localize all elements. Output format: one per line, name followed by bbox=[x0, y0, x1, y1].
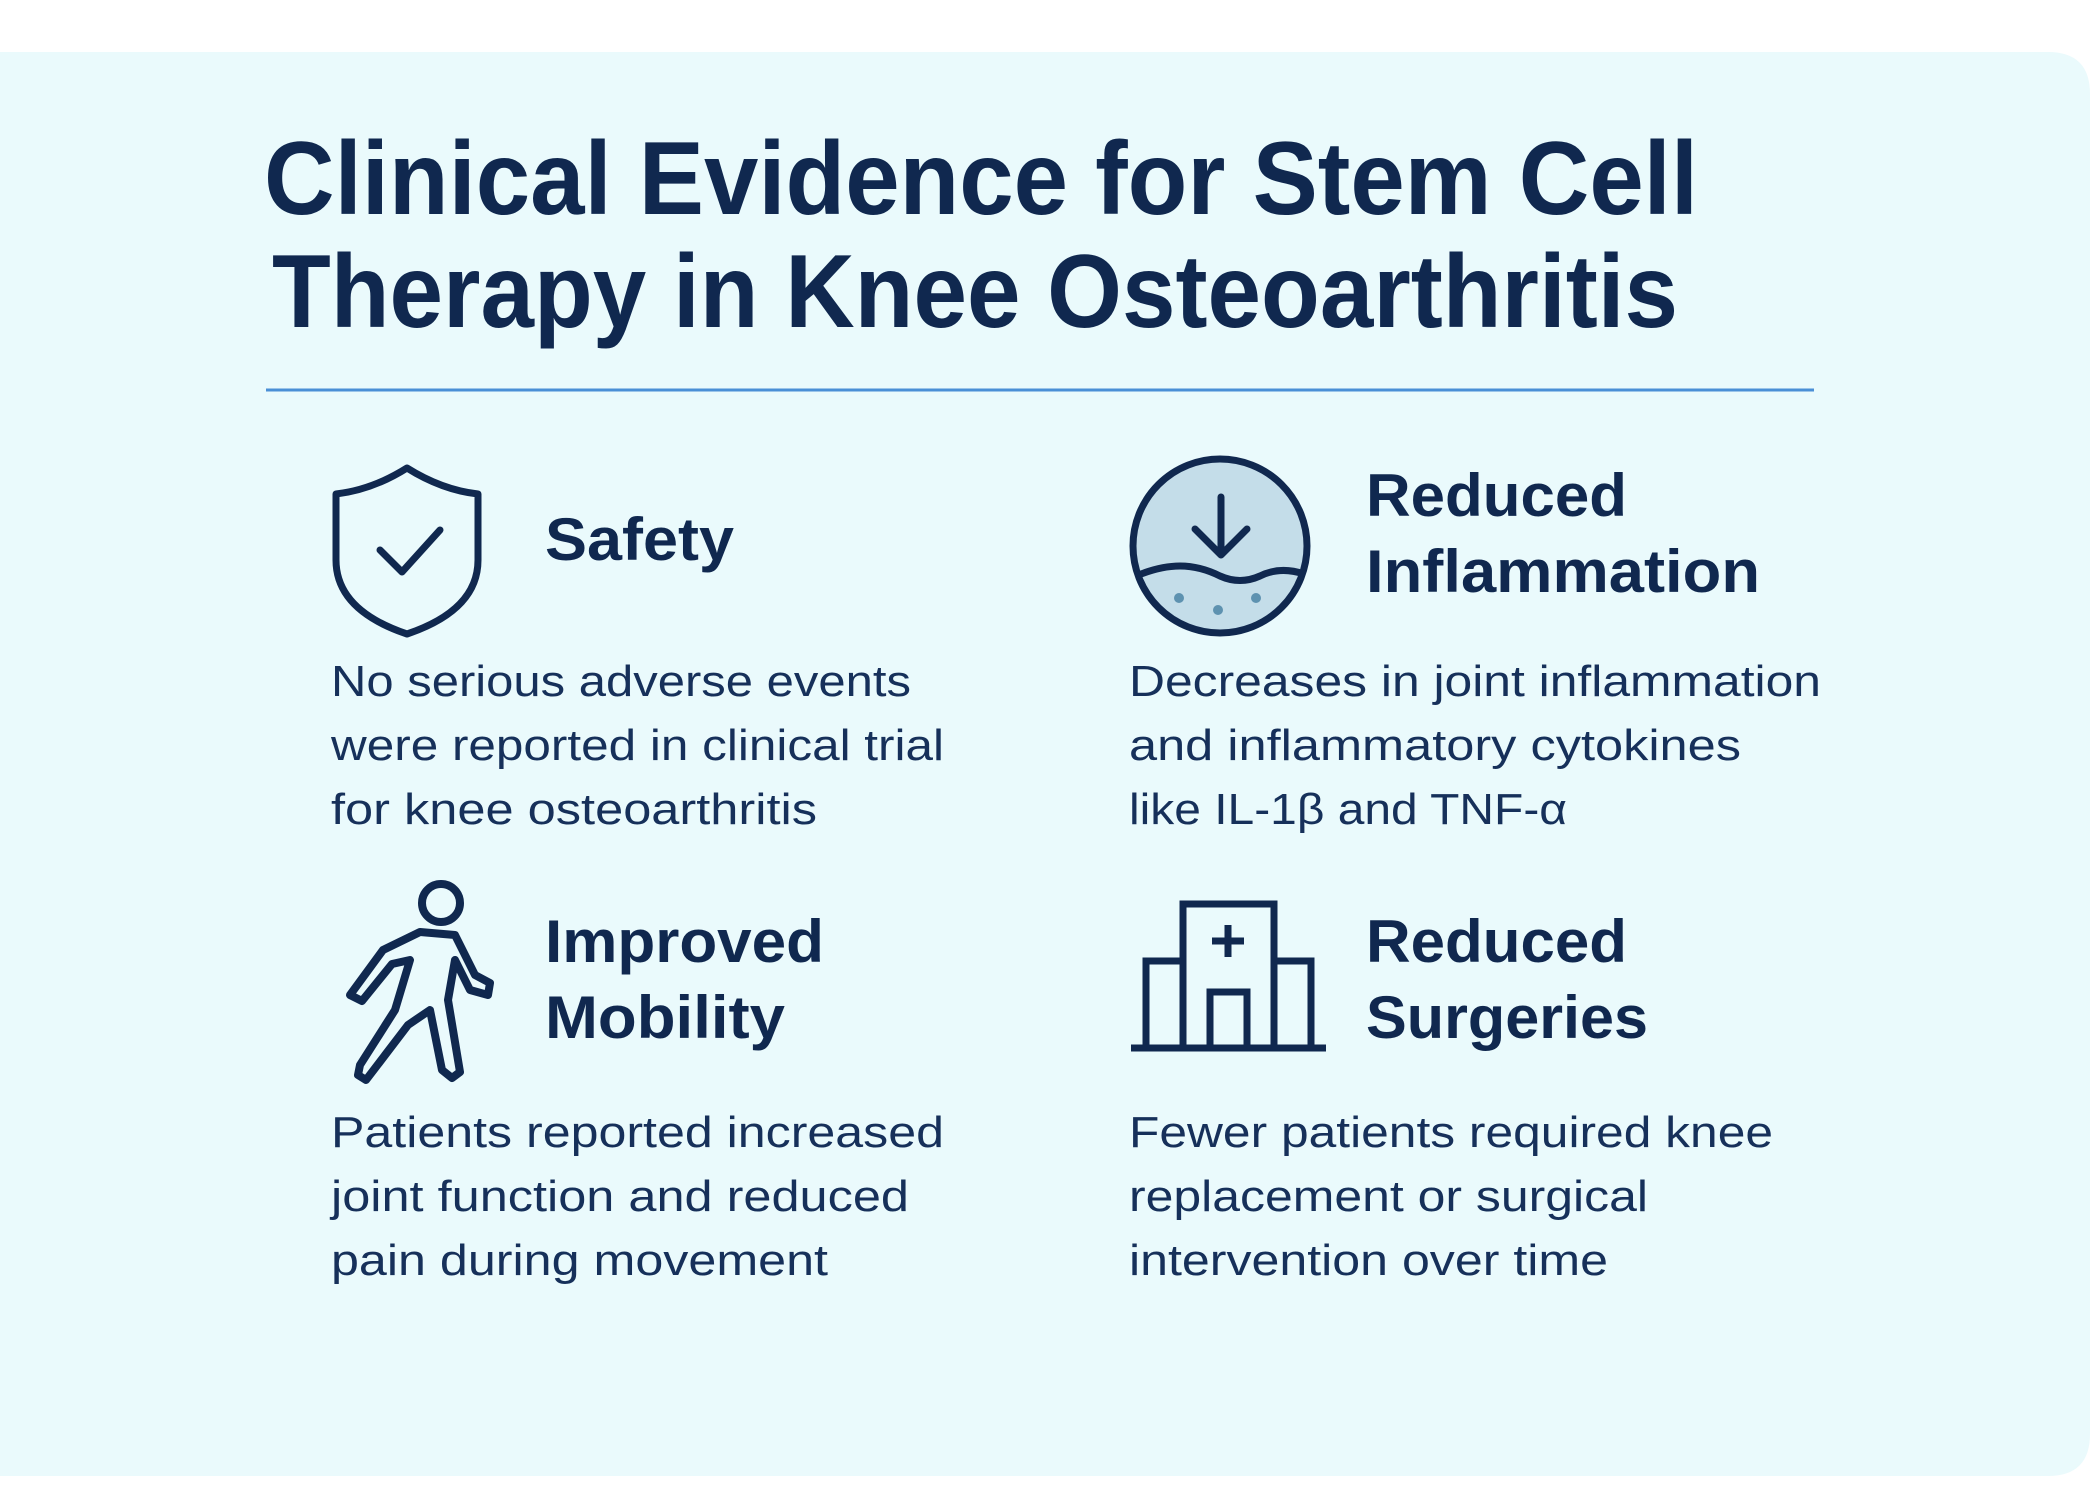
heading: reduced surgeries: Reduced bbox=[1366, 908, 1627, 975]
text: surgeries: Fewer patients required knee bbox=[1129, 1108, 1773, 1157]
title: Clinical Evidence for Stem Cell bbox=[264, 121, 1698, 237]
text: mobility: pain during movement bbox=[331, 1236, 828, 1285]
icon: shield bbox=[336, 468, 478, 634]
heading: improved mobility: Improved bbox=[545, 908, 824, 975]
text: inflammation bbox=[1129, 657, 1821, 834]
panel: reduced inflammation bbox=[1129, 459, 1821, 834]
heading: reduced surgeries: Surgeries bbox=[1366, 984, 1648, 1051]
text: mobility: joint function and reduced bbox=[329, 1172, 909, 1221]
title: Therapy in Knee Osteoarthritis bbox=[272, 234, 1678, 350]
heading: reduced inflammation bbox=[1366, 462, 1760, 605]
icon: inflammation circle bbox=[1133, 459, 1307, 633]
panel: improved mobility bbox=[329, 884, 944, 1285]
text: inflammation: like IL-1β and TNF-α bbox=[1129, 785, 1567, 834]
heading: reduced surgeries bbox=[1366, 908, 1648, 1051]
text: safety: for knee osteoarthritis bbox=[331, 785, 817, 834]
text: mobility bbox=[329, 1108, 944, 1285]
heading: reduced inflammation: Reduced bbox=[1366, 462, 1627, 529]
heading: improved mobility bbox=[545, 908, 824, 1051]
icon: walking person bbox=[350, 884, 490, 1080]
panel: reduced surgeries bbox=[1129, 904, 1773, 1285]
text: surgeries bbox=[1129, 1108, 1773, 1285]
heading: reduced inflammation: Inflammation bbox=[1366, 538, 1760, 605]
text: surgeries: replacement or surgical bbox=[1129, 1172, 1648, 1221]
text: safety: No serious adverse events bbox=[331, 657, 911, 706]
panel: safety bbox=[330, 468, 944, 834]
heading: improved mobility: Mobility bbox=[545, 984, 786, 1051]
text: inflammation: and inflammatory cytokines bbox=[1129, 721, 1741, 770]
text: surgeries: intervention over time bbox=[1129, 1236, 1608, 1285]
text: safety: were reported in clinical trial bbox=[330, 721, 944, 770]
icon: hospital bbox=[1131, 904, 1326, 1048]
text: mobility: Patients reported increased bbox=[331, 1108, 944, 1157]
title bbox=[264, 121, 1698, 350]
text: safety bbox=[330, 657, 944, 834]
text: inflammation: Decreases in joint inflammation bbox=[1129, 657, 1821, 706]
heading: safety: Safety bbox=[545, 506, 735, 573]
